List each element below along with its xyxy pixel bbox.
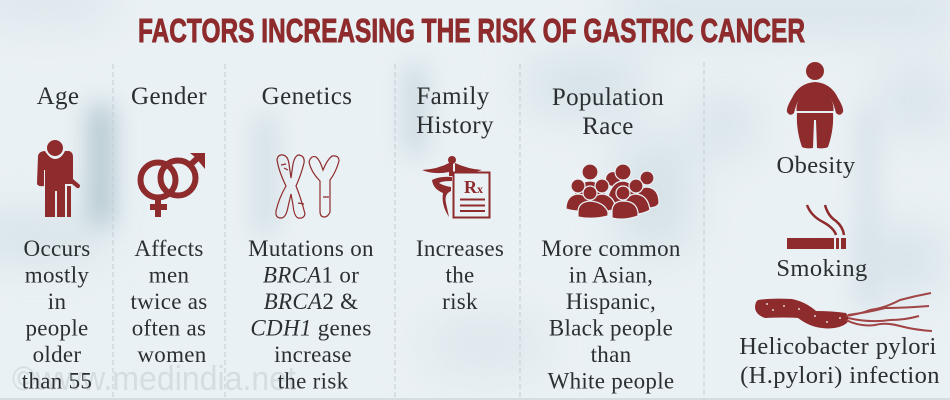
body text: family history: Increases	[416, 236, 504, 261]
heading: genetics: Genetics	[262, 83, 352, 110]
heading: age: Age	[37, 83, 79, 110]
heading: family history: History	[416, 112, 494, 139]
body text: gender: Affects	[134, 236, 204, 261]
icon: XY chromosomes	[276, 155, 339, 218]
body text: population race: than	[591, 342, 632, 367]
panel: gender	[130, 83, 208, 367]
body text: family history: risk	[442, 289, 478, 314]
body text: genetics: Mutations on	[248, 236, 374, 261]
heading: gender: Gender	[131, 83, 207, 110]
panel: other factors	[739, 62, 940, 389]
watermark: ©www.medindia.net	[12, 360, 297, 398]
body text: gender: men	[149, 262, 189, 288]
icon: elderly person with cane	[37, 140, 80, 217]
heading: population race: Race	[582, 113, 634, 140]
body text: age: people	[25, 316, 89, 340]
heading: population race: Population	[552, 84, 664, 111]
body text: age: in	[48, 289, 66, 314]
icon: caduceus and prescription	[422, 156, 490, 218]
body text: age: Occurs	[24, 236, 90, 261]
body text: genetics: increase	[274, 342, 352, 367]
icon: caduceus and prescription: Rx	[464, 177, 483, 197]
icon: obese person	[787, 62, 843, 148]
label: h. pylori infection: Helicobacter pylori	[739, 333, 937, 360]
body text: genetics: BRCA2 &	[264, 289, 358, 314]
icon: cigarette with smoke	[787, 205, 846, 249]
body text: population race: Black people	[549, 316, 673, 340]
body text: gender: often as	[132, 316, 206, 340]
body text: gender: twice as	[130, 289, 208, 314]
body text: age: mostly	[25, 262, 89, 288]
label: smoking: Smoking	[776, 255, 868, 282]
panel: genetics	[248, 83, 374, 394]
body text: population race: More common	[541, 236, 681, 261]
label: obesity: Obesity	[776, 152, 856, 179]
icon: crowd of people	[566, 164, 659, 219]
body text: population race: Hispanic,	[566, 289, 656, 314]
body text: age: older	[33, 342, 81, 367]
body text: genetics: CDH1 genes	[250, 316, 372, 340]
heading: family history: Family	[416, 83, 490, 110]
icon: gender symbols	[140, 153, 205, 217]
panel: population race	[541, 84, 681, 394]
body text: age: than 55	[22, 368, 92, 394]
icon: H. pylori bacterium	[755, 293, 932, 331]
body text: genetics: BRCA1 or	[263, 262, 359, 288]
body text: family history: the	[446, 262, 474, 288]
body text: population race: White people	[548, 368, 674, 394]
body text: gender: women	[137, 342, 207, 367]
panel: family history	[416, 83, 504, 314]
label: h. pylori infection: (H.pylori) infection	[740, 362, 940, 389]
body text: genetics: the risk	[278, 368, 349, 394]
body text: population race: in Asian,	[569, 262, 653, 288]
panel: age	[22, 83, 92, 394]
